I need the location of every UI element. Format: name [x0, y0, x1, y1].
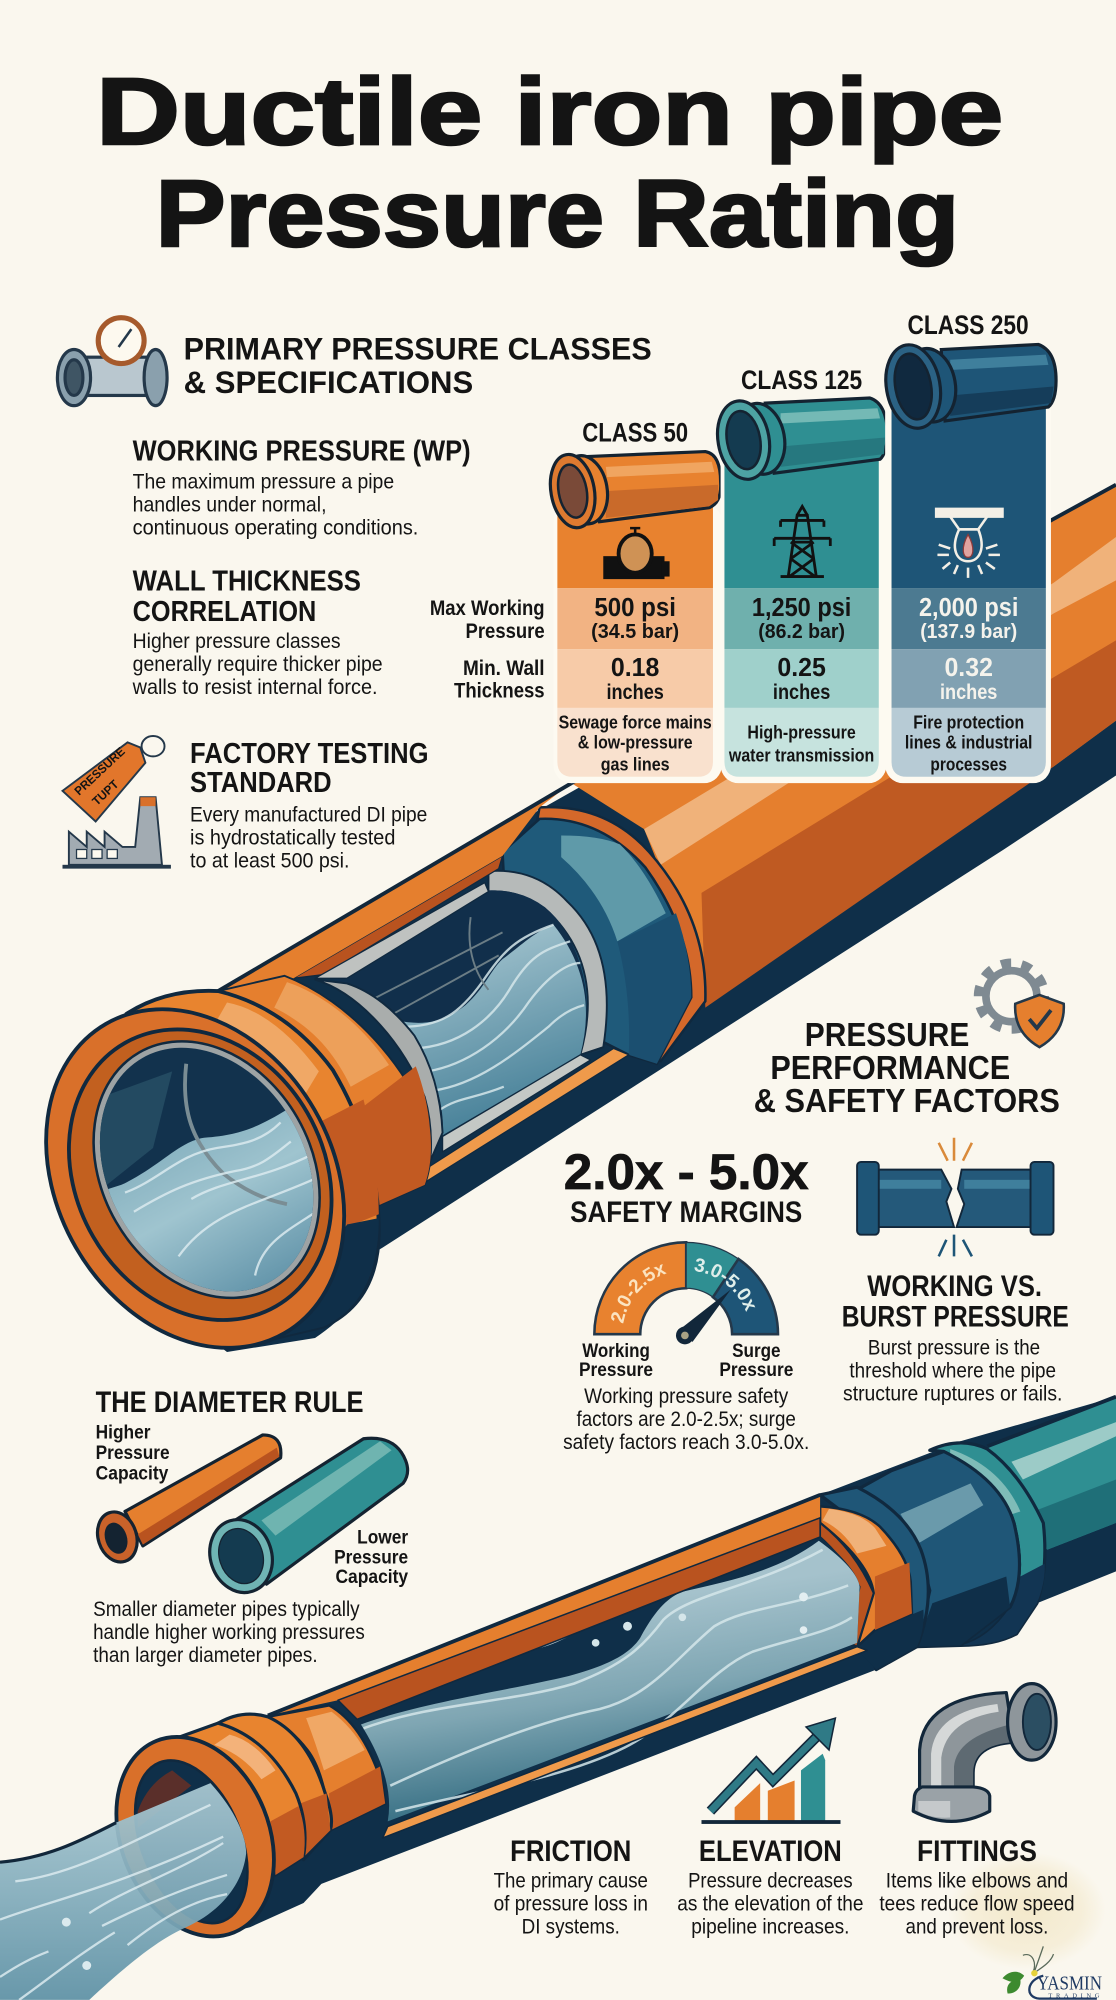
text: elevation: pipeline increases. — [691, 1916, 849, 1939]
text: working pressure: The maximum pressure a pipe — [133, 471, 394, 494]
text: working pressure: WORKING PRESSURE (WP) — [133, 435, 471, 467]
class 125 values: 1,250 psi — [752, 594, 851, 622]
text: factory testing — [190, 738, 429, 872]
text: the diameter rule: Capacity — [96, 1464, 169, 1485]
panel: class 50: (34.5 bar) — [591, 621, 679, 643]
mouth ring — [88, 1713, 302, 1960]
text: wall thickness: walls to resist internal force. — [132, 676, 378, 699]
text: friction: The primary cause — [494, 1870, 648, 1893]
text: the diameter rule: Pressure — [334, 1548, 408, 1569]
right rim — [488, 871, 607, 1055]
text: the diameter rule — [96, 1386, 409, 1588]
heading: pressure performance: & SAFETY FACTORS — [754, 1083, 1060, 1120]
text: wall thickness: generally require thicker pipe — [133, 653, 383, 676]
icon: valve — [605, 528, 668, 578]
text: elevation: Pressure decreases — [688, 1870, 853, 1893]
title — [96, 60, 1003, 267]
text: fittings — [879, 1835, 1075, 1939]
text: smaller diameter: than larger diameter pipes. — [93, 1644, 318, 1667]
text: working vs burst: WORKING VS. — [867, 1270, 1042, 1303]
class 250 values: (137.9 bar) — [920, 621, 1017, 643]
text: wall thickness — [132, 566, 383, 699]
logo: TRADING — [1048, 1992, 1100, 1999]
text: friction — [494, 1835, 648, 1939]
icon: small orange pipe — [91, 1435, 281, 1567]
mouth interior with water — [100, 1048, 314, 1292]
text: working vs burst: threshold where the pipe — [849, 1360, 1056, 1383]
class 250 label: CLASS 250 — [907, 310, 1029, 340]
panel: class 50: & low-pressure — [578, 732, 693, 753]
ring A — [168, 1723, 305, 1875]
stat: safety margins: SAFETY MARGINS — [570, 1196, 802, 1229]
class 250 values: 0.32 — [944, 654, 993, 682]
icon: elevation chart — [701, 1718, 841, 1824]
text: working vs burst — [842, 1270, 1069, 1405]
text: factory testing: Every manufactured DI pipe — [190, 803, 427, 826]
far pipe orange run — [571, 485, 1116, 1008]
text: elevation: ELEVATION — [699, 1835, 842, 1868]
heading: pressure performance: PRESSURE — [805, 1017, 969, 1054]
ring B — [218, 1714, 331, 1860]
text: smaller diameter — [93, 1598, 365, 1667]
text: working vs burst: BURST PRESSURE — [842, 1301, 1069, 1334]
class 125 pipe — [712, 397, 888, 483]
text: safety factors: Working pressure safety — [584, 1385, 789, 1408]
row labels: Pressure — [466, 620, 545, 643]
text: factory testing: to at least 500 psi. — [190, 849, 349, 872]
pipe navy underside — [179, 1397, 1116, 1936]
lower orange strip — [383, 1647, 867, 1838]
text: factory testing: is hydrostatically tested — [190, 826, 395, 849]
gauge chart — [593, 1241, 780, 1344]
class 250 values: Fire protection — [913, 711, 1024, 732]
gauge labels: Pressure — [719, 1359, 793, 1381]
text: smaller diameter: Smaller diameter pipes typically — [93, 1598, 360, 1621]
panel: class 50: Sewage force mains — [559, 711, 712, 732]
text: the diameter rule: Pressure — [96, 1443, 170, 1464]
teal pipe run — [987, 1397, 1116, 1550]
row labels: Max Working — [430, 597, 545, 620]
window strips — [293, 856, 629, 1182]
heading: primary pressure classes — [184, 332, 652, 400]
icon: pylon — [774, 506, 830, 577]
text: the diameter rule: Capacity — [335, 1567, 408, 1588]
panel: class 125 — [712, 365, 888, 783]
gauge labels: Working — [582, 1340, 650, 1362]
row labels — [430, 597, 545, 703]
gauge chart: 2.0-2.5x — [611, 1264, 667, 1324]
navy collar — [857, 1452, 1020, 1647]
heading: primary pressure classes: & SPECIFICATIONS — [184, 365, 473, 400]
dark band underside — [855, 1610, 924, 1670]
text: elevation: as the elevation of the — [677, 1893, 863, 1916]
stat: safety margins — [564, 1144, 809, 1229]
text: the diameter rule: Higher — [96, 1423, 151, 1444]
stain near logo — [948, 1852, 1106, 1969]
text: factory testing: STANDARD — [190, 767, 332, 799]
text: working pressure: handles under normal, — [133, 494, 327, 517]
row labels: Min. Wall — [463, 657, 545, 680]
left collar band — [820, 1487, 928, 1670]
title: Pressure Rating — [156, 162, 959, 267]
class 250 pipe — [880, 340, 1056, 433]
icon: pressure tag and factory — [62, 736, 171, 869]
window interior — [329, 890, 587, 1135]
gauge labels: Pressure — [579, 1359, 653, 1381]
class 250 values: lines & industrial — [905, 732, 1032, 753]
title: Ductile iron pipe — [96, 60, 1003, 165]
navy collar — [503, 819, 691, 1064]
text: smaller diameter: handle higher working pressures — [93, 1621, 365, 1644]
panel: class 125: water transmission — [728, 744, 874, 765]
panel: class 50: gas lines — [601, 753, 670, 774]
gauge labels: Surge — [732, 1340, 781, 1362]
heading: pressure performance: PERFORMANCE — [770, 1050, 1010, 1087]
top frame — [218, 783, 571, 991]
text: safety factors: factors are 2.0-2.5x; surge — [576, 1408, 796, 1431]
text: fittings: and prevent loss. — [906, 1916, 1048, 1939]
panel: class 125: (86.2 bar) — [758, 621, 845, 643]
gauge chart: 3.0-5.0x — [694, 1258, 756, 1312]
top frame strips — [268, 1495, 820, 1719]
text: elevation — [677, 1835, 863, 1939]
icon: pressure tag and factory: TUPT — [89, 777, 122, 808]
lower cutaway pipe — [88, 1397, 1116, 1960]
text: working vs burst: structure ruptures or fails. — [843, 1382, 1062, 1405]
text: wall thickness: Higher pressure classes — [133, 630, 341, 653]
heading: pressure performance — [754, 1017, 1060, 1120]
text: working pressure: continuous operating conditions. — [133, 516, 418, 539]
icon: pressure tag and factory: PRESSURE — [72, 744, 128, 798]
water jet — [0, 1783, 246, 2000]
stat: safety margins: 2.0x - 5.0x — [564, 1144, 809, 1200]
panel: class 50: inches — [606, 681, 664, 704]
sleeve — [268, 1705, 385, 1830]
orange band — [820, 1506, 912, 1647]
window water — [361, 1541, 860, 1821]
rust frame — [820, 1523, 874, 1647]
teal ring — [930, 1443, 1045, 1645]
class 125 label: CLASS 125 — [741, 365, 862, 395]
class 250 values: inches — [940, 681, 997, 704]
panel: class 125: 0.25 — [777, 654, 826, 682]
text: the diameter rule: THE DIAMETER RULE — [96, 1386, 363, 1419]
text: factory testing: FACTORY TESTING — [190, 738, 429, 770]
window interior — [357, 1537, 860, 1821]
text: fittings: Items like elbows and — [886, 1870, 1068, 1893]
mouth lip — [0, 955, 404, 1402]
icon: pipe with gauge — [57, 318, 167, 406]
text: wall thickness: WALL THICKNESS — [133, 566, 361, 598]
text: friction: FRICTION — [510, 1835, 631, 1868]
panel: class 50 — [545, 417, 722, 783]
text: working vs burst: Burst pressure is the — [868, 1337, 1040, 1360]
class 250 values — [905, 594, 1032, 774]
icon: large teal pipe — [201, 1438, 408, 1601]
gauge labels — [579, 1340, 793, 1381]
text: wall thickness: CORRELATION — [133, 596, 316, 628]
class 50 label: CLASS 50 — [582, 417, 688, 447]
panel: class 125: High-pressure — [747, 722, 856, 743]
left rim — [315, 980, 443, 1162]
heading: primary pressure classes: PRIMARY PRESSURE CLASSES — [184, 332, 652, 367]
class 250 values: processes — [930, 753, 1007, 774]
text: safety factors: safety factors reach 3.0-5.0x. — [563, 1431, 809, 1454]
class 250 values: 2,000 psi — [919, 594, 1018, 622]
icon: sprinkler — [936, 509, 1002, 578]
text: fittings: tees reduce flow speed — [879, 1893, 1075, 1916]
text: safety factors — [563, 1385, 809, 1454]
icon: gear and shield — [978, 963, 1064, 1047]
second ring — [126, 991, 379, 1349]
panel: class 50: 0.18 — [611, 654, 659, 682]
row labels: Thickness — [454, 680, 545, 703]
collar ring — [510, 807, 705, 1061]
pipe navy underside — [128, 485, 1116, 1352]
sleeve — [218, 976, 431, 1219]
icon: elbow fitting — [913, 1684, 1056, 1821]
class 50 values: 500 psi — [594, 594, 676, 622]
window water — [374, 917, 586, 1135]
text: working pressure — [133, 435, 471, 539]
text: friction: DI systems. — [522, 1916, 620, 1939]
logo — [1002, 1946, 1102, 1999]
icon: broken pipe — [857, 1138, 1054, 1256]
panel: class 250 — [880, 310, 1056, 783]
panel: class 125: inches — [773, 681, 830, 704]
upper cutaway pipe — [0, 485, 1116, 1402]
text: friction: of pressure loss in — [494, 1893, 648, 1916]
text: fittings: FITTINGS — [917, 1835, 1037, 1868]
logo: YASMIN — [1037, 1973, 1102, 1995]
class 50 pipe — [545, 451, 721, 531]
text: the diameter rule: Lower — [357, 1527, 409, 1548]
top frame outline — [218, 783, 571, 991]
